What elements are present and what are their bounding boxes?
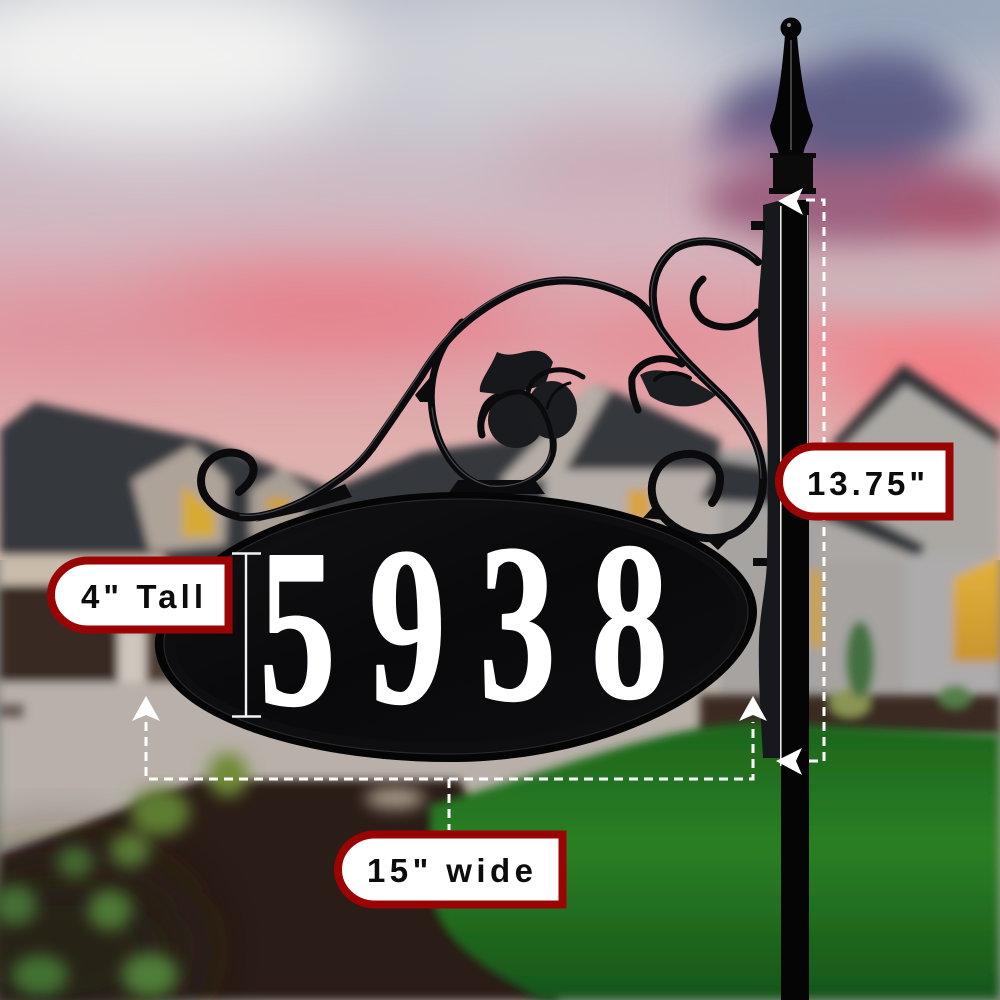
callout: 4 inch tall — [51, 560, 228, 630]
callout: 13.75 inch: 13.75" — [807, 465, 925, 502]
mid house — [330, 385, 735, 570]
address sign assembly — [155, 18, 816, 1000]
finial spike — [770, 18, 813, 155]
house number 5938: 9 — [369, 501, 446, 751]
bracket bolts — [751, 221, 767, 566]
house number 5938: 3 — [479, 498, 556, 748]
callout: 15 inch wide: 15" wide — [367, 852, 533, 889]
background: blurred houses and yard — [0, 364, 1000, 1000]
callout: 15 inch wide — [338, 834, 562, 904]
dimension arrow: width right — [739, 696, 767, 721]
callout: 13.75 inch — [779, 446, 950, 516]
right house — [700, 364, 1000, 710]
dimension: height dashed line — [806, 200, 824, 761]
post — [769, 153, 816, 1000]
bracket behind post — [758, 200, 782, 758]
rose bud ornament — [480, 351, 583, 455]
background: blurred dusk sky — [0, 0, 1000, 560]
background: lawn, mulch and plants — [0, 622, 1000, 1000]
oval plaque — [155, 492, 757, 762]
left house — [0, 402, 350, 719]
scroll junction feet — [255, 375, 730, 550]
dimension arrow: height bottom — [776, 748, 802, 775]
dimension: digit height bar — [232, 554, 261, 716]
callout: 4 inch tall: 4" Tall — [81, 578, 203, 615]
leaf ornament — [632, 359, 716, 410]
house number 5938: 5 — [259, 503, 336, 753]
scrollwork — [201, 239, 763, 550]
dimension arrow: width left — [132, 696, 160, 721]
house number 5938: 8 — [591, 496, 668, 746]
dimension arrow: height top — [778, 188, 803, 215]
dimension: width dashed line — [146, 722, 753, 830]
house number 5938 — [259, 496, 668, 753]
